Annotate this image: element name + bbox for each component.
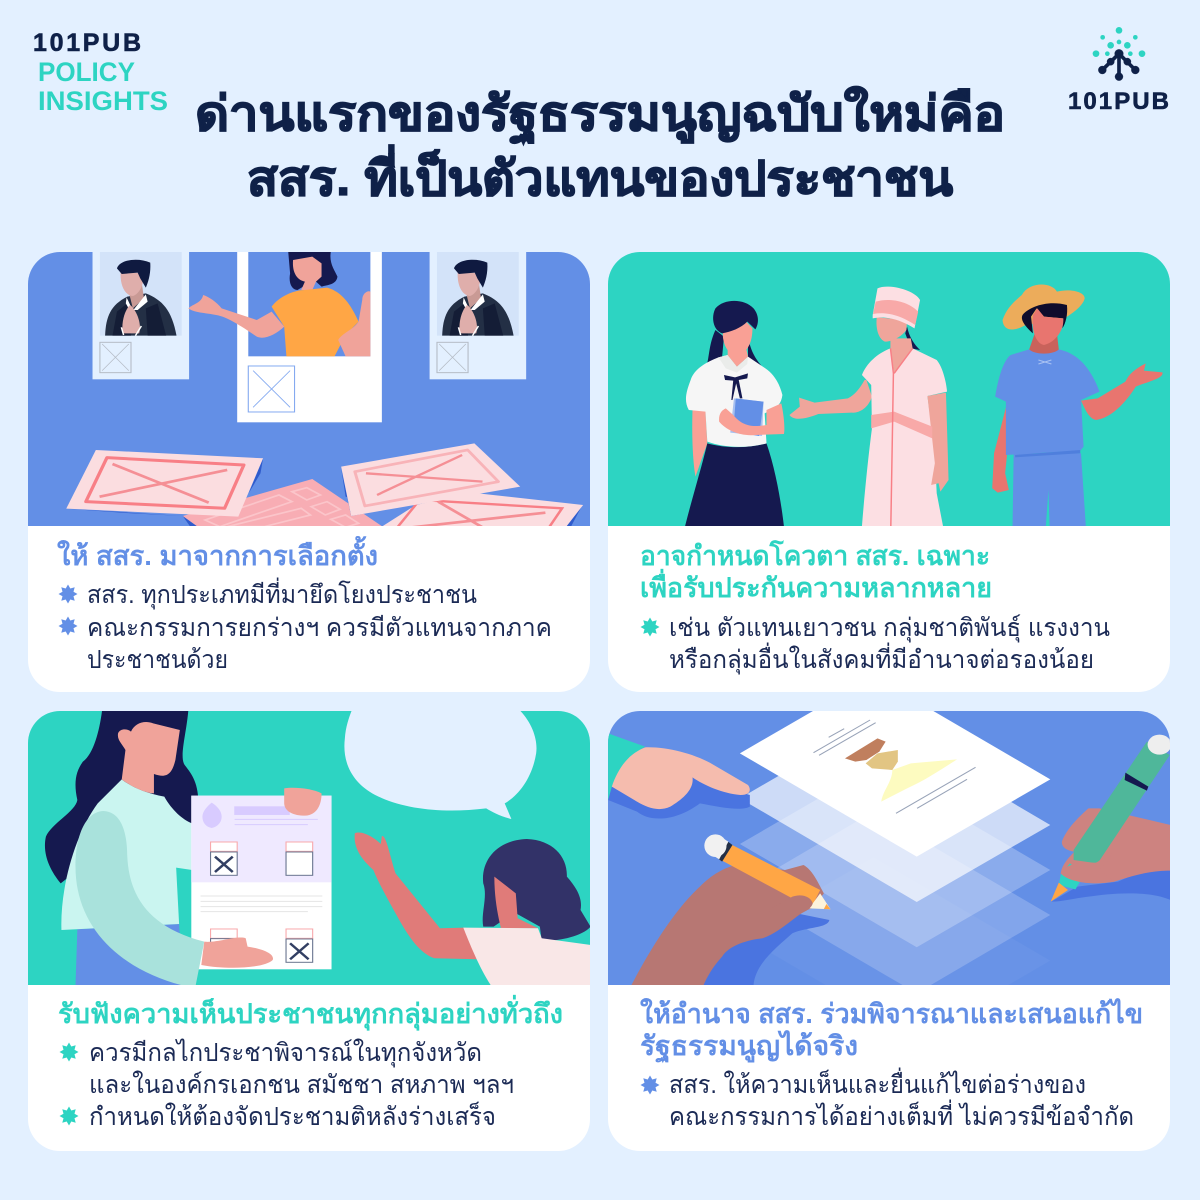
title: ด่านแรกของรัฐธรรมนูญฉบับใหม่คือ — [195, 85, 1005, 145]
bullet list: คณะกรรมการยกร่างฯ ควรมีตัวแทนจากภาค — [87, 614, 552, 642]
title — [195, 85, 1005, 206]
illustration: student, woman and farmer — [608, 252, 1170, 526]
illustration: woman with ballot paper and speech bubble — [28, 710, 591, 985]
illustration: candidate posters and ballots — [28, 252, 590, 527]
logo: 101PUB Policy Insights: 101PUB — [33, 29, 141, 57]
bullet list — [58, 577, 552, 674]
heading — [640, 539, 992, 603]
bullet list: ควรมีกลไกประชาพิจารณ์ในทุกจังหวัด — [89, 1038, 482, 1068]
heading: เพื่อรับประกันความหลากหลาย — [640, 568, 992, 603]
bullet list — [640, 1067, 1134, 1131]
bullet list: คณะกรรมการได้อย่างเต็มที่ ไม่ควรมีข้อจำกัด — [669, 1099, 1134, 1131]
illustration: hands over layered documents — [608, 711, 1170, 985]
bullet list — [640, 614, 1110, 675]
bullet list: และในองค์กรเอกชน สมัชชา สหภาพ ฯลฯ — [89, 1070, 514, 1099]
panel: power to amend — [608, 676, 1171, 1151]
heading: ให้อำนาจ สสร. ร่วมพิจารณาและเสนอแก้ไข — [640, 998, 1143, 1029]
bullet list: ประชาชนด้วย — [87, 646, 228, 674]
heading — [640, 998, 1143, 1064]
bullet list: สสร. ให้ความเห็นและยื่นแก้ไขต่อร่างของ — [669, 1067, 1086, 1099]
heading: อาจกำหนดโควตา สสร. เฉพาะ — [640, 539, 990, 571]
bullet list: กำหนดให้ต้องจัดประชามติหลังร่างเสร็จ — [89, 1101, 496, 1131]
logo: 101PUB network mark — [1068, 27, 1169, 115]
logo: 101PUB Policy Insights: POLICY — [38, 57, 135, 87]
panel: quotas for diversity — [608, 252, 1170, 692]
logo: 101PUB Policy Insights: INSIGHTS — [38, 86, 168, 116]
bullet list: หรือกลุ่มอื่นในสังคมที่มีอำนาจต่อรองน้อย — [669, 642, 1094, 675]
heading: รับฟังความเห็นประชาชนทุกกลุ่มอย่างทั่วถึง — [58, 994, 563, 1031]
bullet list: เช่น ตัวแทนเยาวชน กลุ่มชาติพันธุ์ แรงงาน — [669, 614, 1110, 643]
panel: elected members — [28, 252, 590, 692]
heading: รัฐธรรมนูญได้จริง — [640, 1030, 858, 1064]
panel: public hearings — [28, 710, 591, 1151]
heading: ให้ สสร. มาจากการเลือกตั้ง — [57, 535, 378, 571]
logo: 101PUB Policy Insights — [33, 29, 168, 116]
bullet list: สสร. ทุกประเภทมีที่มายึดโยงประชาชน — [87, 577, 477, 610]
bullet list — [60, 1038, 514, 1131]
logo: 101PUB network mark: 101PUB — [1068, 88, 1169, 115]
title: สสร. ที่เป็นตัวแทนของประชาชน — [247, 144, 953, 206]
